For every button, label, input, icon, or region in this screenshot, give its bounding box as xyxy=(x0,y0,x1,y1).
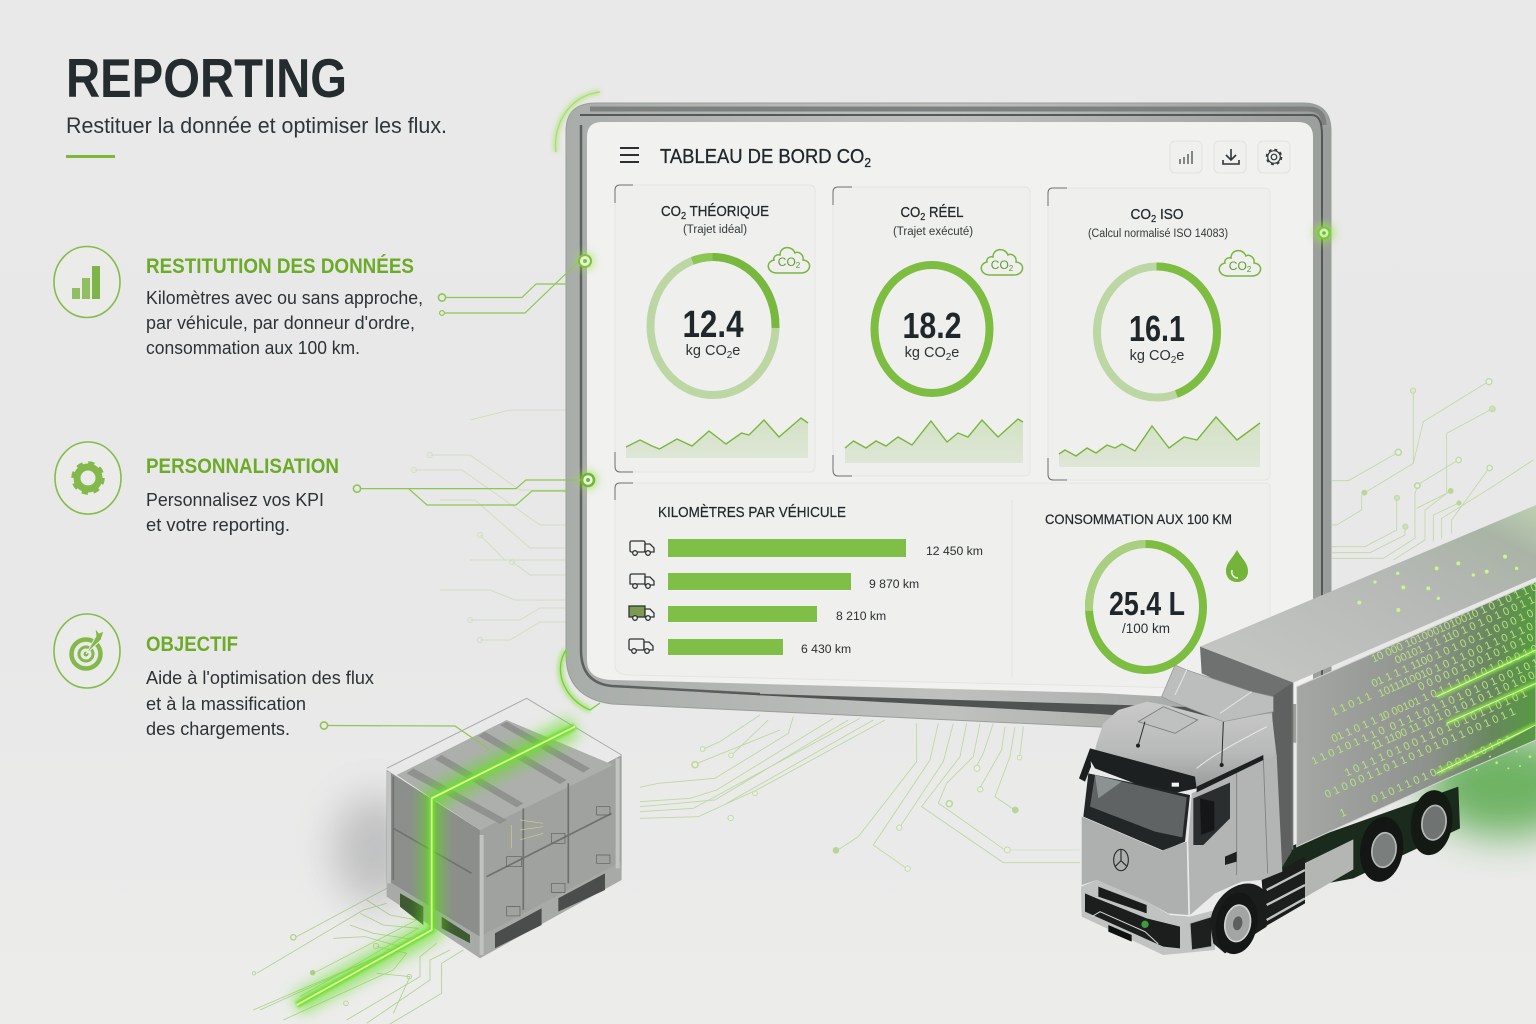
ring gauge xyxy=(874,265,990,393)
carton left face xyxy=(387,770,480,940)
icon: fuel drop xyxy=(1226,550,1248,582)
glow arc: dashboard bottom-left xyxy=(560,650,600,710)
logo star xyxy=(1114,849,1128,871)
icon: CO2 cloud xyxy=(768,248,810,273)
icon: CO2 cloud: 2 xyxy=(1247,265,1252,274)
card title: CO xyxy=(900,205,922,221)
section: objectif xyxy=(54,614,375,739)
data streaks xyxy=(1437,650,1536,773)
sparkline xyxy=(626,418,808,458)
glow arc: dashboard top-left xyxy=(555,92,600,152)
connector: dashboard right node xyxy=(1313,222,1335,244)
card: CO2 théorique xyxy=(615,185,815,472)
icon: CO2 cloud: CO xyxy=(778,255,796,269)
chassis steps xyxy=(1262,857,1305,927)
bumper and grille xyxy=(1081,880,1215,955)
unit: kg CO xyxy=(1130,348,1171,364)
cab roof xyxy=(1095,702,1277,787)
description: et votre reporting. xyxy=(146,514,290,535)
title: REPORTING xyxy=(66,47,347,109)
sparkline xyxy=(1059,417,1260,467)
pallet shadow xyxy=(333,795,417,905)
carton top face xyxy=(397,720,613,830)
title underline xyxy=(66,155,115,158)
panel: vehicle km and consumption xyxy=(615,483,1270,690)
icon: CO2 cloud xyxy=(981,250,1023,275)
card subtitle: (Trajet idéal) xyxy=(683,224,747,236)
bar row 2: 9 870 km xyxy=(869,577,919,591)
card title: 2 xyxy=(1151,214,1157,225)
heading: consumption: CONSOMMATION AUX 100 KM xyxy=(1045,511,1232,527)
unit: 2 xyxy=(1171,355,1177,366)
ring gauge xyxy=(1097,266,1217,398)
card title: RÉEL xyxy=(925,204,964,221)
tablet screen xyxy=(587,122,1313,705)
section: restitution des données xyxy=(54,246,423,358)
ring gauge: consumption xyxy=(1089,544,1203,670)
bar row 3: 8 210 km xyxy=(836,609,886,623)
data particles xyxy=(1476,751,1531,771)
icon: download button xyxy=(1214,141,1246,173)
description xyxy=(146,667,375,739)
card: CO2 réel xyxy=(833,187,1030,476)
dashboard title: 2 xyxy=(864,155,871,170)
icon: CO2 cloud: CO xyxy=(1229,259,1247,273)
tablet frame xyxy=(566,103,1331,745)
binary data on trailer: 1 1 0 1 0 1 1 1 0 xyxy=(1310,724,1387,768)
value: 18.2 xyxy=(902,305,962,346)
sparkline xyxy=(845,419,1023,463)
card title: ISO xyxy=(1156,207,1184,223)
card title: THÉORIQUE xyxy=(686,203,769,220)
door window xyxy=(1193,783,1230,845)
cab rear wall xyxy=(1272,683,1292,873)
heading: OBJECTIF xyxy=(146,633,238,656)
binary data on trailer: 1 xyxy=(1338,807,1348,820)
pallet base xyxy=(387,862,622,958)
unit: kg CO xyxy=(905,345,946,361)
card: CO2 ISO xyxy=(1048,188,1270,480)
carton edges xyxy=(393,777,612,910)
icon: CO2 cloud xyxy=(1219,251,1261,276)
description xyxy=(146,287,423,358)
value: consumption: 25.4 L xyxy=(1109,585,1185,622)
icon: CO2 cloud: CO xyxy=(991,258,1009,272)
connector: personnalisation to dashboard xyxy=(353,470,598,505)
dashboard title: TABLEAU DE BORD CO xyxy=(660,146,882,168)
side skirt xyxy=(1263,839,1353,921)
unit: kg CO xyxy=(686,343,727,359)
pallet with cartons xyxy=(297,698,622,1005)
front wheel xyxy=(1210,883,1267,957)
binary data on trailer: 01 1 0 1 1 1 xyxy=(1330,711,1388,745)
sun visor xyxy=(1090,748,1197,795)
bar row 3 xyxy=(629,606,886,623)
circuit traces: right of dashboard xyxy=(1332,379,1533,560)
green data glow behind truck xyxy=(1425,733,1536,837)
trailer side xyxy=(1297,582,1536,847)
description: des chargements. xyxy=(146,718,290,739)
card title: 2 xyxy=(920,212,926,223)
icon: settings button xyxy=(1258,141,1290,173)
card subtitle: (Calcul normalisé ISO 14083) xyxy=(1088,228,1228,240)
heading: km per vehicle: KILOMÈTRES PAR VÉHICULE xyxy=(658,504,846,521)
circuit traces: left of dashboard xyxy=(412,410,566,642)
bar row 4 xyxy=(629,639,851,656)
binary data on trailer xyxy=(1310,563,1536,820)
top stripes xyxy=(407,722,590,824)
icon: CO2 cloud: 2 xyxy=(1009,264,1014,273)
mirror xyxy=(1079,748,1091,782)
roof deflector xyxy=(1162,665,1273,722)
heading: PERSONNALISATION xyxy=(146,455,339,478)
unit: e xyxy=(732,343,740,359)
windshield xyxy=(1083,773,1190,851)
unit: e xyxy=(1176,348,1184,364)
cab front xyxy=(1082,817,1188,915)
icon: target in circle xyxy=(54,614,120,688)
heading: RESTITUTION DES DONNÉES xyxy=(146,255,414,278)
card title: CO xyxy=(1130,207,1152,223)
laser glow xyxy=(297,727,575,1005)
header bar xyxy=(620,141,1290,173)
description: Kilomètres avec ou sans approche, xyxy=(146,287,423,308)
description: par véhicule, par donneur d'ordre, xyxy=(146,312,415,333)
bar row 1: 12 450 km xyxy=(926,544,983,558)
binary data on trailer: 1 1 0 1 1 xyxy=(1330,690,1374,719)
lid frame outline xyxy=(387,698,622,768)
subtitle: Restituer la donnée et optimiser les flux. xyxy=(66,113,447,138)
bar row 4: 6 430 km xyxy=(801,642,851,656)
unit: consumption: /100 km xyxy=(1122,621,1170,636)
description: et à la massification xyxy=(146,693,306,714)
unit: 2 xyxy=(727,350,733,361)
description xyxy=(146,489,324,535)
data sparks on roof xyxy=(1357,555,1518,612)
binary data on trailer: 0 1 0 1 1 0 1 0 1 0 0 1 1 0 1 0 1 xyxy=(1370,733,1514,806)
description: Aide à l'optimisation des flux xyxy=(146,667,375,688)
description: Personnalisez vos KPI xyxy=(146,489,324,510)
bar row 1 xyxy=(630,539,983,558)
chassis xyxy=(1273,787,1460,893)
unit: e xyxy=(951,345,959,361)
circuit traces: under pallet xyxy=(252,888,463,1024)
carton right face xyxy=(480,755,622,940)
rear wheels xyxy=(1356,787,1457,885)
icon: signal button xyxy=(1170,141,1202,173)
trailer front xyxy=(1200,647,1293,850)
trailer top xyxy=(1200,505,1536,683)
description: consommation aux 100 km. xyxy=(146,337,360,358)
icon: gear in circle xyxy=(55,442,121,514)
card title: 2 xyxy=(681,211,687,222)
bar row 2 xyxy=(630,573,919,591)
bar chart xyxy=(629,539,983,656)
icon: CO2 cloud: 2 xyxy=(796,261,801,270)
icon: bar chart in circle xyxy=(54,246,120,318)
connector: restitution to dashboard xyxy=(438,251,595,315)
ring gauge xyxy=(650,257,776,395)
truck: tractor cab xyxy=(1079,665,1305,957)
value: 16.1 xyxy=(1129,308,1185,349)
section: personnalisation xyxy=(55,442,339,535)
value: 12.4 xyxy=(682,304,744,346)
binary data on trailer: 0 1 0 0 0 1 1 0 1 1 0 1 0 1 0 1 1 0 0 1 0 1 1 xyxy=(1323,706,1518,801)
connector: objectif to pallet xyxy=(320,722,490,750)
card title: CO xyxy=(661,204,683,220)
dashboard tablet xyxy=(566,103,1331,745)
cab side xyxy=(1188,755,1282,915)
circuit traces: below dashboard xyxy=(640,715,1080,871)
truck: trailer and chassis xyxy=(1200,505,1536,921)
card subtitle: (Trajet exécuté) xyxy=(893,226,973,238)
unit: 2 xyxy=(946,352,952,363)
binary data on trailer: 1 0 1 1 1 0 1 0 0 1 1 0 1 0 1 0 1 1 0 1 0 1 xyxy=(1343,688,1529,779)
icon: menu xyxy=(620,148,639,162)
